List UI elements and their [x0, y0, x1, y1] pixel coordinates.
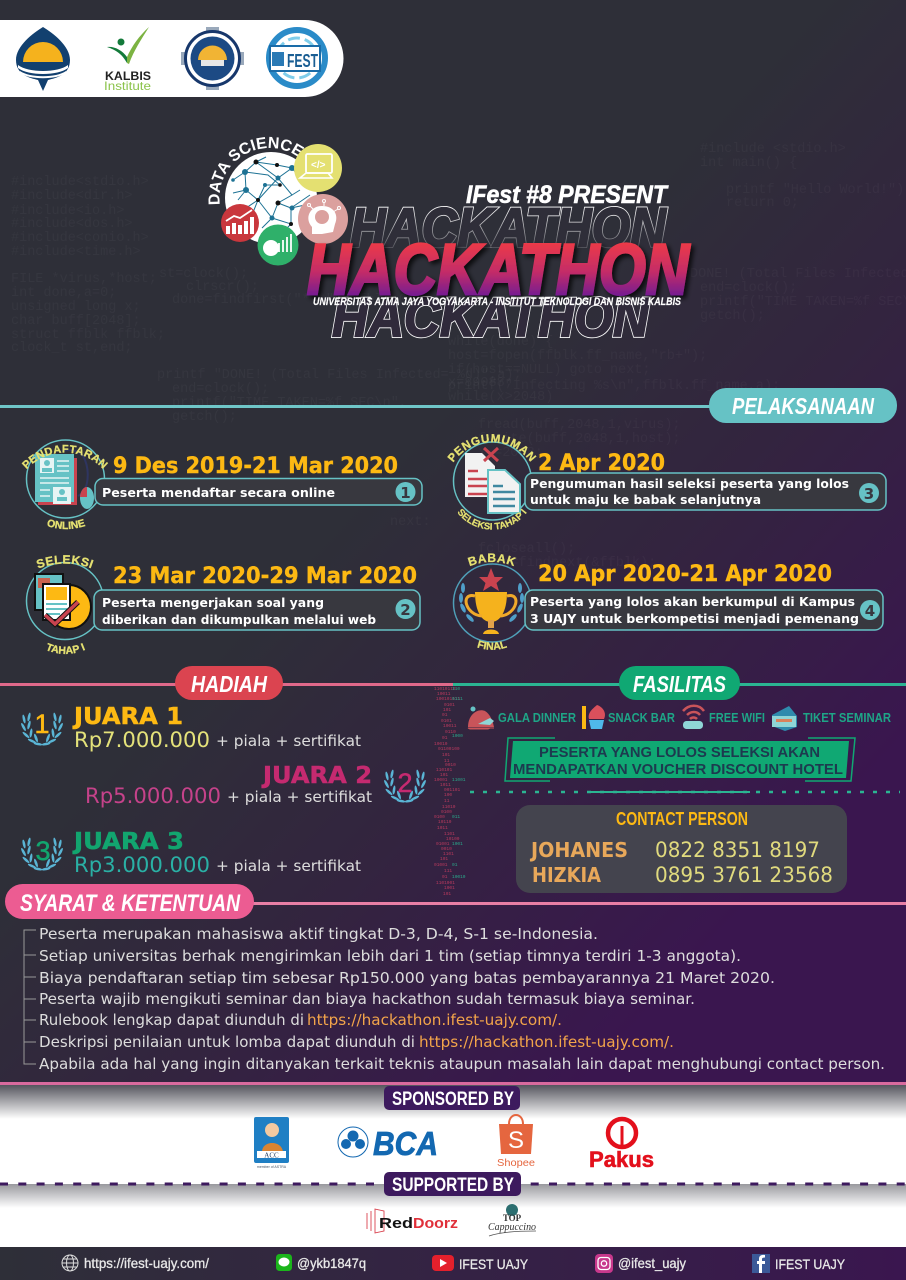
- faint code background: getch();: [172, 410, 237, 425]
- voucher banner: [505, 738, 855, 781]
- contact person panel: JOHANES: [529, 838, 628, 862]
- step 1 box: Peserta mendaftar secara online: [102, 485, 335, 500]
- logo: IFest: FEST: [287, 51, 318, 71]
- icon: youtube: [432, 1255, 454, 1271]
- faint code background: printf("Infecting %s\n",ffblk.ff_name,a);: [448, 379, 780, 394]
- footer: youtube: IFEST UAJY: [459, 1256, 529, 1272]
- binary code strip: 10001: [434, 777, 448, 783]
- contact person panel: [516, 805, 847, 893]
- logo: Kalbis Institute: KALBIS: [105, 71, 151, 83]
- step 1 badge: [22, 439, 108, 530]
- faint code background: #include<io.h>: [11, 204, 124, 219]
- logo: Shopee: Shopee: [497, 1157, 535, 1169]
- outline top: HACKATHON: [350, 196, 667, 258]
- faint code background: #include<time.h>: [11, 245, 141, 260]
- step 2 box: Peserta mengerjakan soal yang: [102, 595, 324, 610]
- icon: instagram: [595, 1254, 613, 1273]
- icon: globe: [62, 1255, 78, 1271]
- faint code background: while(x>2048): [448, 390, 553, 405]
- binary code strip: 10010: [434, 741, 448, 747]
- step 4 box: Peserta yang lolos akan berkumpul di Kampus: [530, 594, 855, 609]
- binary code strip: 1001: [452, 841, 463, 847]
- logo: Shopee: [497, 1115, 535, 1169]
- contact person panel: 0895 3761 23568: [655, 863, 833, 887]
- logo: BCA: [338, 1125, 438, 1162]
- faint code background: [11, 142, 906, 571]
- binary code strip: 0100: [434, 814, 445, 820]
- faint code background: struct ffblk ffblk;: [11, 328, 165, 343]
- binary code strip: 01: [442, 874, 448, 880]
- supported by pill: SUPPORTED BY: [392, 1175, 514, 1196]
- divider bar: [582, 706, 586, 729]
- step 2 date: 23 Mar 2020-29 Mar 2020: [113, 564, 417, 589]
- logo: ACC: ACC: [264, 1152, 279, 1160]
- footer: instagram: @ifest_uajy: [618, 1255, 686, 1271]
- faint code background: printf "DONE! (Total Files Infected= %d)",a);: [157, 368, 522, 383]
- laurel 3: 3: [35, 836, 51, 866]
- step 2 box: 2: [400, 601, 411, 619]
- arc text: Data Science: DATA SCIENCE: [208, 136, 304, 204]
- faint code background: done=findfirst("*.*",&ffblk,0);: [172, 293, 423, 308]
- faint code background: x=89088;: [448, 376, 513, 391]
- step 2 badge: TAHAP I: [47, 642, 86, 654]
- binary code strip: 1011: [437, 825, 448, 831]
- outline bottom: HACKATHON: [332, 286, 650, 348]
- icon: laptop code: </>: [311, 160, 326, 171]
- faint code background: #include<dos.h>: [11, 217, 133, 232]
- logo: Pakus: [589, 1119, 654, 1172]
- binary code strip: 11: [444, 758, 450, 764]
- step 1 date: 9 Des 2019-21 Mar 2020: [113, 454, 398, 479]
- heading pill: pelaksanaan: PELAKSANAAN: [732, 393, 874, 419]
- step 3 box: untuk maju ke babak selanjutnya: [530, 492, 761, 507]
- heading pill: syarat: SYARAT & KETENTUAN: [20, 890, 241, 917]
- binary code strip: 11010: [442, 804, 456, 810]
- binary code strip: 1101: [444, 831, 455, 837]
- heading pill: hadiah: HADIAH: [191, 671, 267, 697]
- binary code strip: 01: [452, 862, 458, 868]
- faint code background: getch();: [700, 309, 765, 324]
- label: tiket seminar: TIKET SEMINAR: [803, 711, 891, 725]
- subtitle: UNIVERSITAS ATMA JAYA YOGYAKARTA - INSTITUT TEKNOLOGI DAN BISNIS KALBIS: [313, 296, 682, 308]
- step 4 badge: [452, 553, 530, 650]
- contact person panel: CONTACT PERSON: [616, 809, 748, 829]
- outline top: HACKATHON: [350, 196, 667, 258]
- terms list: Deskripsi penilaian untuk lomba dapat diunduh di: [39, 1033, 415, 1051]
- section: syarat dan ketentuan: [5, 884, 906, 1073]
- outline bottom: HACKATHON: [332, 286, 650, 348]
- binary code strip: 01100100: [438, 746, 460, 752]
- binary code strip: 0100: [441, 809, 452, 815]
- logo: IFest: [269, 30, 325, 86]
- faint code background: fcloseall();: [478, 542, 575, 557]
- heading pill: syarat: [5, 884, 254, 919]
- binary code strip: 100: [444, 792, 452, 798]
- logo: Top Cappuccino: [488, 1204, 536, 1236]
- binary code strip: 101: [440, 772, 448, 778]
- logo: UAJY shield: [16, 27, 70, 91]
- binary code strip: 1101: [443, 851, 454, 857]
- step 3 box: 3: [864, 485, 874, 503]
- title block: [307, 181, 690, 348]
- faint code background: x-=2048;: [478, 446, 543, 461]
- step 2 badge: [26, 555, 102, 654]
- faint code background: #include<conio.h>: [11, 231, 149, 246]
- section: pelaksanaan: [0, 388, 897, 423]
- prize 1: + piala + sertifikat: [216, 732, 361, 750]
- network globe: [225, 152, 317, 244]
- terms list: Peserta merupakan mahasiswa aktif tingkat D-3, D-4, S-1 se-Indonesia.: [39, 925, 598, 943]
- prize 3: Rp3.000.000: [74, 853, 210, 877]
- terms list: https://hackathon.ifest-uajy.com/.: [419, 1033, 674, 1051]
- binary code strip: 1011: [440, 782, 451, 788]
- faint code background: #include<dir.h>: [11, 189, 133, 204]
- binary code strip: 01: [442, 735, 448, 741]
- contact person panel: 0822 8351 8197: [655, 838, 820, 862]
- label: gala dinner: GALA DINNER: [498, 711, 576, 725]
- faint code background: fwrite(buff,2048,1,host);: [478, 432, 681, 447]
- binary code strip: 101: [443, 707, 451, 713]
- prize 2: Rp5.000.000: [85, 784, 221, 808]
- step 4 badge: BABAK: [468, 553, 516, 566]
- prize 1: [20, 704, 361, 752]
- binary code strip: 100101111: [436, 696, 461, 702]
- step 2 box: [94, 590, 420, 630]
- binary code strip: 0110: [445, 729, 456, 735]
- label: snack bar: SNACK BAR: [608, 711, 675, 725]
- contact person panel: HIZKIA: [532, 863, 601, 887]
- step 3 box: Pengumuman hasil seleksi peserta yang lolos: [530, 476, 849, 491]
- prize 2: + piala + sertifikat: [227, 788, 372, 806]
- binary code strip: 11: [444, 798, 450, 804]
- binary code strip: 10011: [437, 691, 451, 697]
- footer: facebook: IFEST UAJY: [775, 1256, 846, 1272]
- icon: laptop code: [294, 144, 342, 192]
- binary code strip: 011: [452, 814, 460, 820]
- step 1 badge: ONLINE: [47, 518, 86, 530]
- binary code strip: 111: [444, 868, 452, 874]
- heading pill: pelaksanaan: [709, 388, 897, 423]
- binary code strip: 101: [442, 752, 450, 758]
- logo: Top Cappuccino: TOP: [503, 1213, 522, 1223]
- logo: RedDoorz: Doorz: [413, 1215, 458, 1232]
- step 3 box: [525, 473, 886, 510]
- prize 1: JUARA 1: [72, 704, 183, 730]
- terms list: [39, 925, 885, 1073]
- IFest present: IFest #8 PRESENT: [466, 181, 670, 209]
- logo: Kalbis Institute: [104, 27, 151, 93]
- icon: red bar chart: [221, 204, 259, 242]
- logo: Kalbis Institute: Institute: [104, 79, 151, 93]
- prize 2: JUARA 2: [261, 763, 372, 789]
- main heading: HACKATHON: [307, 231, 690, 310]
- sponsored by pill: SPONSORED BY: [392, 1089, 514, 1110]
- faint code background: host=fopen(ffblk.ff_name,"rb+");: [448, 349, 707, 364]
- step 2: seleksi tahap I: [26, 555, 421, 654]
- prize 2: [85, 763, 427, 808]
- binary code strip: 110101: [436, 767, 453, 773]
- binary code strip: 10011: [443, 723, 457, 729]
- binary code strip: 01: [442, 712, 448, 718]
- terms list: Apabila ada hal yang ingin ditanyakan terkait teknis ataupun masalah lain dapat menghubungi contact person.: [39, 1055, 885, 1073]
- binary code strip: 11001: [452, 777, 466, 783]
- step 2 box: diberikan dan dikumpulkan melalui web: [102, 612, 376, 627]
- footer bar: [0, 1247, 906, 1280]
- step 1 box: [95, 478, 422, 505]
- step 1 badge: PENDAFTARAN: [22, 444, 108, 469]
- faint code background: end=clock();: [700, 281, 797, 296]
- step 1 box: 1: [400, 484, 411, 502]
- label: free wifi: FREE WIFI: [709, 711, 765, 725]
- heading pill: hadiah: [175, 666, 283, 700]
- laurel 2: [383, 768, 427, 803]
- heading pill: fasilitas: [619, 666, 740, 700]
- faint code background: printf("TIME TAKEN=%f SEC\n",: [172, 396, 407, 411]
- footer: website: https://ifest-uajy.com/: [84, 1255, 209, 1271]
- step 3 badge: PENGUMUMAN: [447, 434, 536, 462]
- icon: green pie chart: [258, 224, 298, 266]
- logo: faculty emblem: [181, 27, 244, 90]
- binary code strip: 110: [452, 686, 460, 692]
- logo: ACC: [254, 1117, 289, 1169]
- laurel 2: 2: [397, 768, 413, 798]
- voucher banner: MENDAPATKAN VOUCHER DISCOUNT HOTEL: [513, 761, 843, 778]
- step 3 date: 2 Apr 2020: [538, 451, 665, 476]
- faint code background: st=clock();: [159, 267, 248, 282]
- section: hadiah: [0, 666, 453, 877]
- binary code strip: 0101: [444, 702, 455, 708]
- faint code background: unsigned long x;: [11, 300, 141, 315]
- voucher banner: PESERTA YANG LOLOS SELEKSI AKAN: [539, 744, 820, 761]
- logo: BCA: BCA: [373, 1125, 438, 1162]
- faint code background: if(host==NULL) goto next;: [448, 363, 651, 378]
- faint code background: clrscr();: [186, 280, 259, 295]
- faint code background: int done,a=0;: [11, 286, 116, 301]
- laurel 1: [20, 709, 64, 746]
- binary code strip: 01001: [436, 841, 450, 847]
- data science badge: [208, 136, 348, 266]
- terms list: Biaya pendaftaran setiap tim sebesar Rp150.000 yang batas pembayarannya 21 Maret 2020.: [39, 969, 775, 987]
- laurel 3: [20, 836, 64, 871]
- step 1: pendaftaran: [22, 439, 423, 530]
- binary code strip: 0111: [452, 696, 463, 702]
- faint code background: int main() {: [700, 156, 797, 171]
- binary code strip: 101: [440, 856, 448, 862]
- faint code background: next:: [390, 515, 431, 530]
- logo: RedDoorz: [367, 1209, 458, 1233]
- footer: line id: @ykb1847q: [297, 1255, 366, 1271]
- logo: Top Cappuccino: Cappuccino: [488, 1222, 536, 1233]
- terms list: https://hackathon.ifest-uajy.com/.: [307, 1011, 562, 1029]
- binary code strip: 0010: [441, 846, 452, 852]
- icon: ticket: [772, 706, 797, 731]
- binary code strip: 1001: [444, 885, 455, 891]
- icon: gala dinner: [468, 706, 494, 729]
- step 4 box: 3 UAJY untuk berkompetisi menjadi pemenang: [530, 611, 859, 626]
- logo: RedDoorz: Red: [379, 1215, 413, 1232]
- faint code background: FILE *virus,*host;: [11, 272, 157, 287]
- step 4 date: 20 Apr 2020-21 Apr 2020: [538, 562, 832, 587]
- binary code strip: 11010110: [434, 686, 456, 692]
- binary code strip: 10100: [446, 836, 460, 842]
- icon: line: [276, 1254, 292, 1271]
- logo: ACC: member of ASTRA: [257, 1165, 287, 1169]
- faint code background: clock_t st,end;: [11, 341, 133, 356]
- step 4 badge: FINAL: [477, 640, 508, 650]
- logo: Pakus: Pakus: [589, 1147, 654, 1172]
- binary code strip: 0010: [445, 762, 456, 768]
- laurel 1: 1: [34, 709, 50, 739]
- faint code background: #include <stdio.h>: [700, 142, 846, 157]
- prize 3: [20, 829, 361, 877]
- icon: facebook: [752, 1254, 770, 1273]
- icon: snack bar: [589, 705, 605, 729]
- faint code background: while(done) {: [448, 335, 553, 350]
- logo: Shopee: S: [508, 1127, 524, 1154]
- terms list: Peserta wajib mengikuti seminar dan biaya hackathon sudah termasuk biaya seminar.: [39, 990, 695, 1008]
- sponsors area: [0, 1082, 906, 1248]
- prize 1: Rp7.000.000: [74, 728, 210, 752]
- terms list: Setiap universitas berhak mengirimkan lebih dari 1 tim (setiap timnya terdiri 1-3 anggota).: [39, 947, 741, 965]
- binary code strip: 0101: [441, 718, 452, 724]
- faint code background: #include<stdio.h>: [11, 175, 149, 190]
- step 4: babak final: [452, 553, 884, 650]
- faint code background: done=findnext(&ffblk);: [478, 556, 656, 571]
- binary code strip: 001101: [444, 787, 461, 793]
- prize 3: JUARA 3: [72, 829, 184, 855]
- icon: brain head: [298, 194, 348, 244]
- binary code strip: 1000: [452, 733, 463, 739]
- binary code strip: 01001: [434, 862, 448, 868]
- step 3 badge: [447, 434, 536, 530]
- binary code strip: 101: [443, 891, 451, 897]
- faint code background: fread(buff,2048,1,virus);: [478, 418, 681, 433]
- prize 3: + piala + sertifikat: [216, 857, 361, 875]
- icon: free wifi: [683, 706, 704, 729]
- step 2 badge: SELEKSI: [36, 555, 94, 568]
- step 3 badge: SELEKSI TAHAP I: [458, 508, 527, 530]
- step 4 box: 4: [865, 602, 875, 620]
- faint code background: char buff[2048];: [11, 314, 141, 329]
- binary code strip: 10110: [438, 819, 452, 825]
- logo bar: [0, 20, 344, 97]
- step 3: pengumuman: [447, 434, 887, 530]
- heading pill: fasilitas: FASILITAS: [633, 671, 727, 697]
- step 4 box: [525, 590, 883, 630]
- faint code background: end=clock();: [172, 382, 269, 397]
- section: fasilitas: [453, 666, 906, 893]
- binary code strip: [434, 686, 466, 897]
- binary code strip: 1101001: [436, 880, 455, 886]
- binary code strip: 10010: [452, 874, 466, 880]
- terms list: Rulebook lengkap dapat diunduh di: [39, 1011, 304, 1029]
- faint code background: return 0;: [726, 196, 799, 211]
